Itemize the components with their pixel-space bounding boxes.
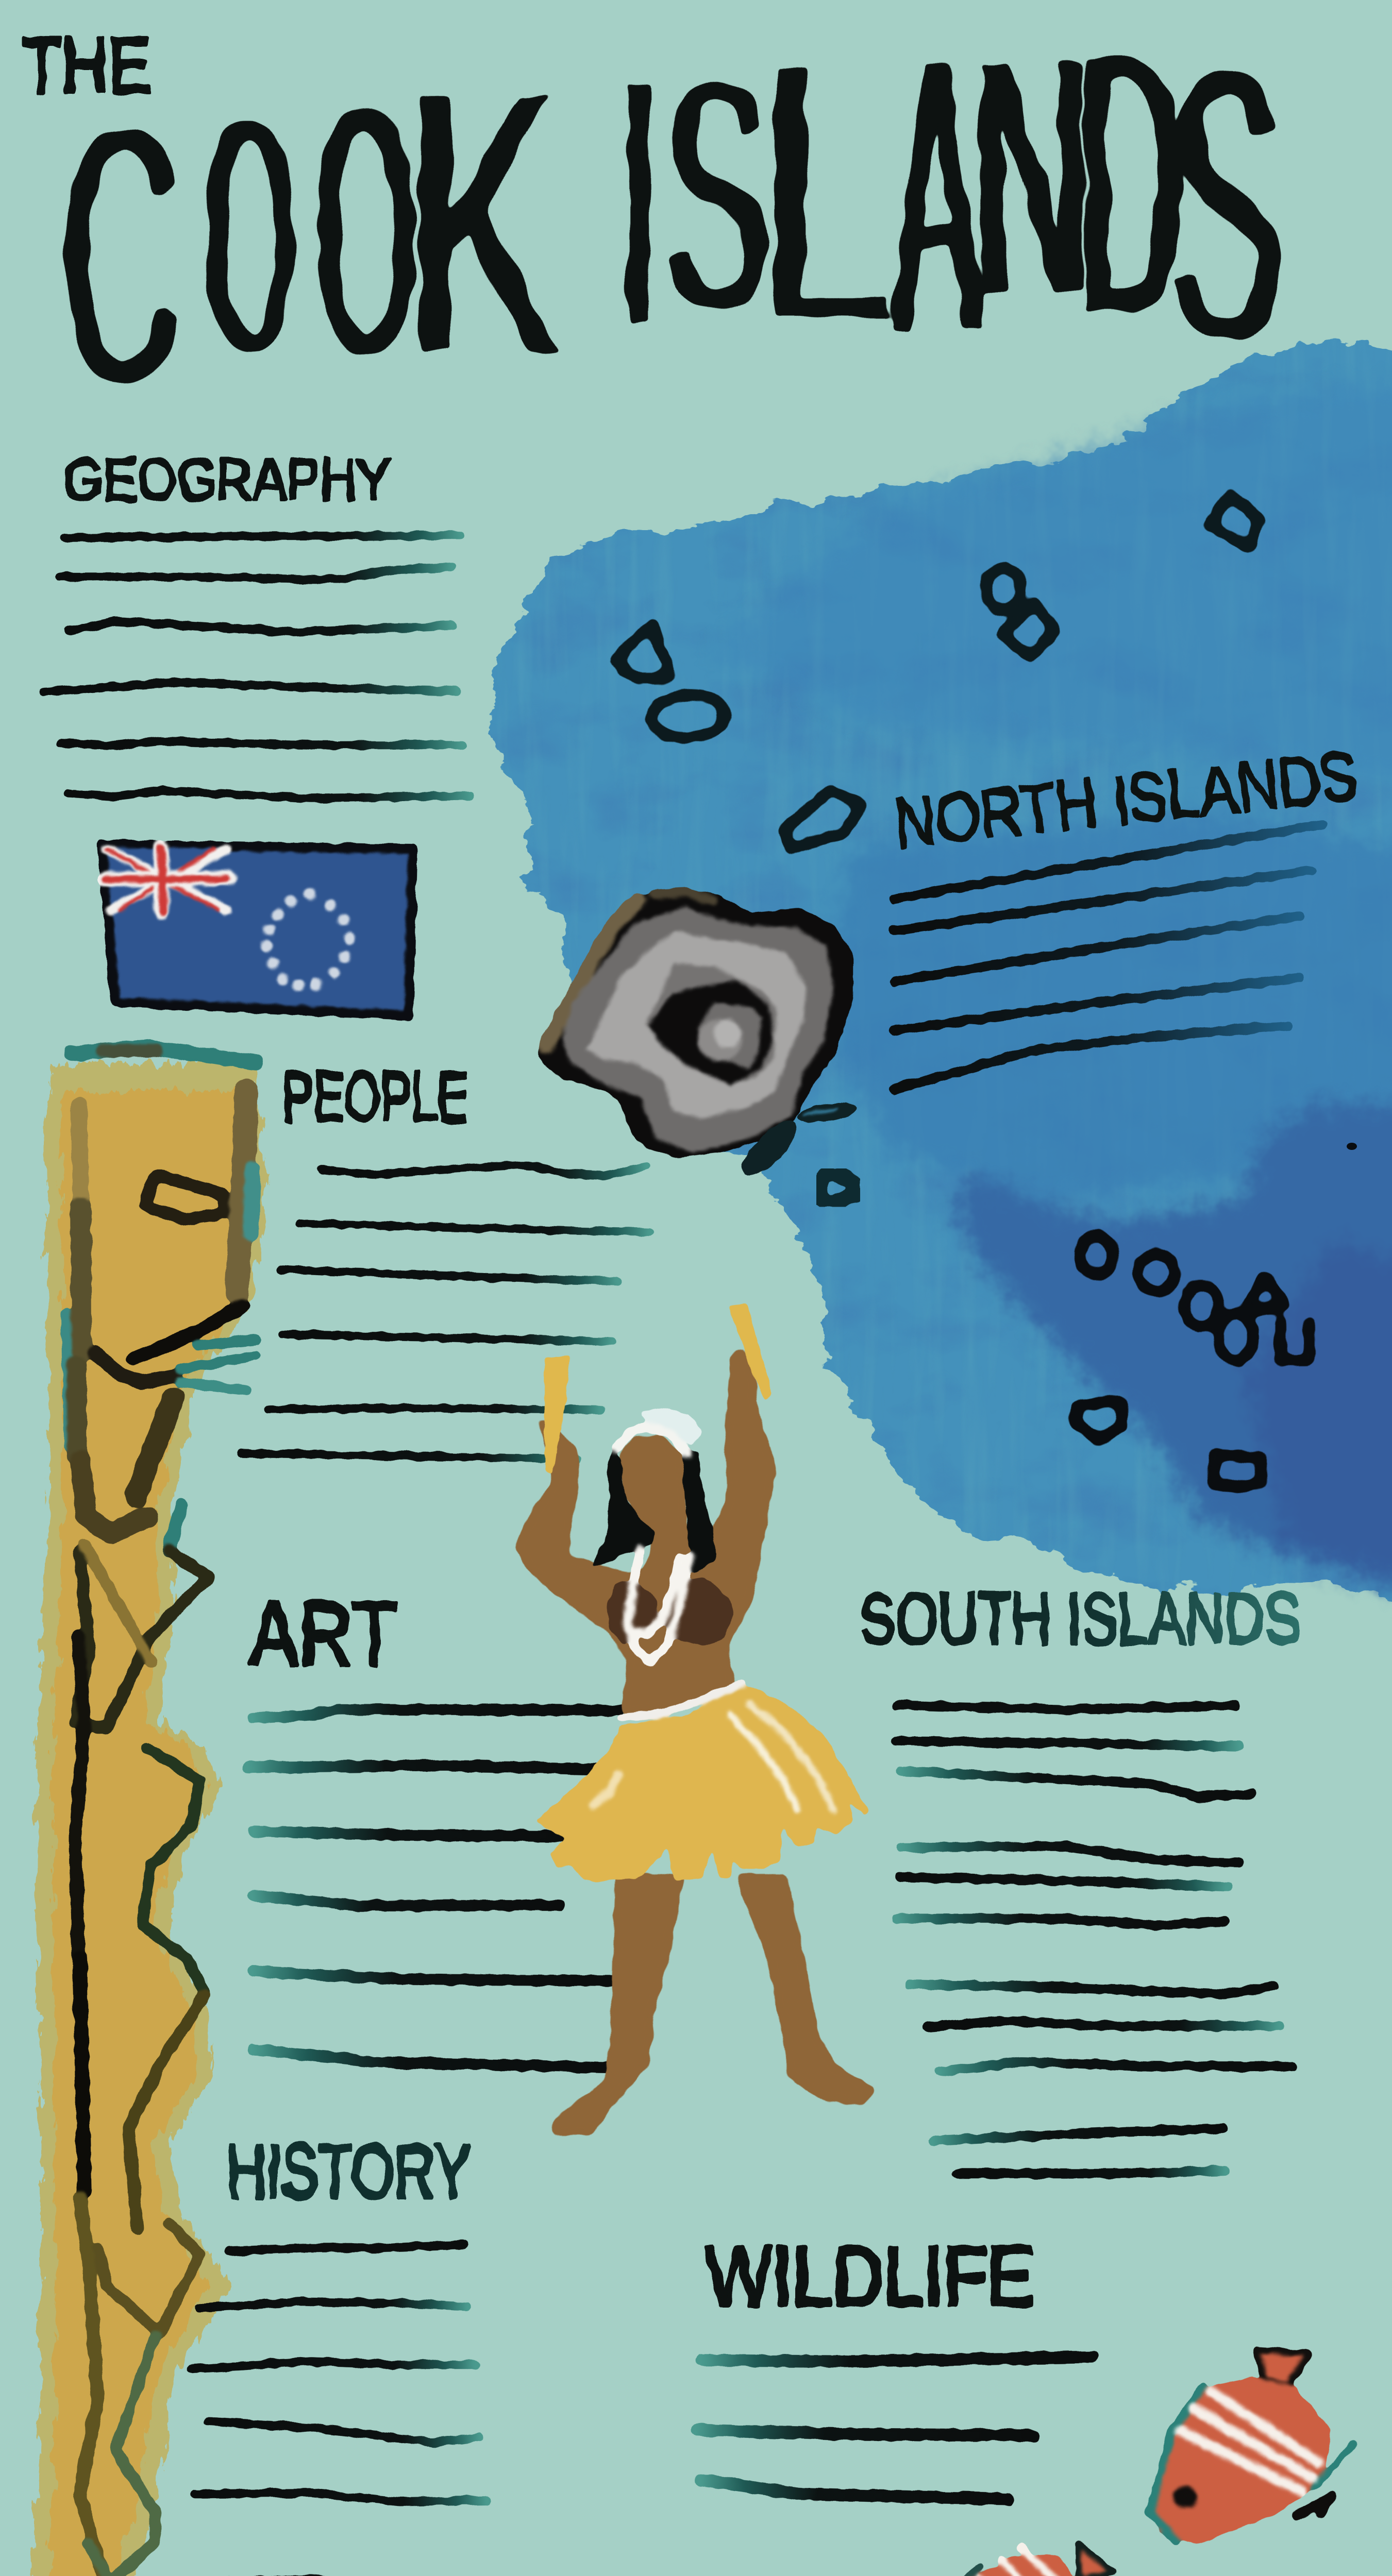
dancer: body — [516, 1348, 875, 2134]
headband and flower — [617, 1408, 703, 1453]
text lines: history — [191, 2245, 487, 2576]
text lines: art — [248, 1709, 635, 2068]
title words: Cook Islands: S — [665, 10, 768, 379]
fish: middle — [936, 2545, 1114, 2576]
islands: northern group — [614, 494, 1310, 1487]
title words: Cook Islands: K — [405, 11, 563, 436]
title words: Cook Islands: S — [1170, 0, 1284, 425]
panel: south islands — [859, 1578, 1301, 2174]
totem: lower painted lines — [75, 1504, 209, 2576]
sticks — [544, 1303, 773, 1473]
title words: Cook Islands: O — [315, 28, 417, 431]
heading: history: HISTORY — [226, 2129, 471, 2214]
panel: north islands — [890, 736, 1362, 1090]
island: tiny speck — [1347, 1143, 1357, 1150]
heading: people: PEOPLE — [282, 1057, 468, 1137]
title words: Cook Islands: C — [60, 46, 181, 464]
panel: art — [248, 1584, 635, 2068]
panel: geography — [43, 447, 471, 1015]
ocean: blue watercolour area — [488, 345, 1392, 1636]
illustration: hula dancer — [516, 1303, 875, 2134]
skirt highlights — [593, 1704, 833, 1809]
dancer: hair, top, necklace, skirt and sticks — [534, 1303, 869, 1882]
panel: wildlife — [697, 2229, 1354, 2576]
island: main grey Rarotonga — [538, 888, 853, 1158]
hair — [592, 1450, 716, 1574]
illustration: clownfish school — [866, 2350, 1354, 2576]
heading: geography: GEOGRAPHY — [64, 447, 391, 513]
text lines: people — [242, 1165, 650, 1459]
text lines: north islands — [894, 824, 1322, 1090]
totem: upper face painting — [66, 1047, 256, 1533]
text lines: wildlife — [697, 2357, 1092, 2499]
panel: history — [191, 2129, 487, 2576]
icon: Cook Islands flag — [102, 844, 413, 1015]
necklace — [628, 1551, 690, 1662]
totem: ochre body — [31, 1061, 266, 2576]
title words: Cook Islands: O — [205, 49, 296, 423]
top — [607, 1576, 734, 1647]
title words: Cook Islands — [60, 0, 1284, 464]
panel: totem pole — [31, 1047, 266, 2576]
heading: art: ART — [248, 1584, 398, 1685]
fish: top right — [1150, 2350, 1354, 2545]
ocean: darker blue shading — [710, 387, 1392, 1609]
panel: people — [242, 1057, 650, 1459]
map: ocean with islands — [488, 345, 1392, 1636]
heading: wildlife: WILDLIFE — [706, 2229, 1034, 2323]
title words: Cook Islands: I — [622, 0, 656, 406]
island: small ring south of main island — [818, 1171, 858, 1205]
text lines: geography — [43, 536, 471, 799]
title word: The: THE — [22, 22, 151, 109]
island: small bow-shaped motu — [734, 1099, 859, 1183]
text lines: south islands — [897, 1705, 1292, 2174]
skirt — [534, 1685, 869, 1882]
title: The Cook Islands — [22, 0, 1284, 464]
belt — [621, 1683, 743, 1717]
